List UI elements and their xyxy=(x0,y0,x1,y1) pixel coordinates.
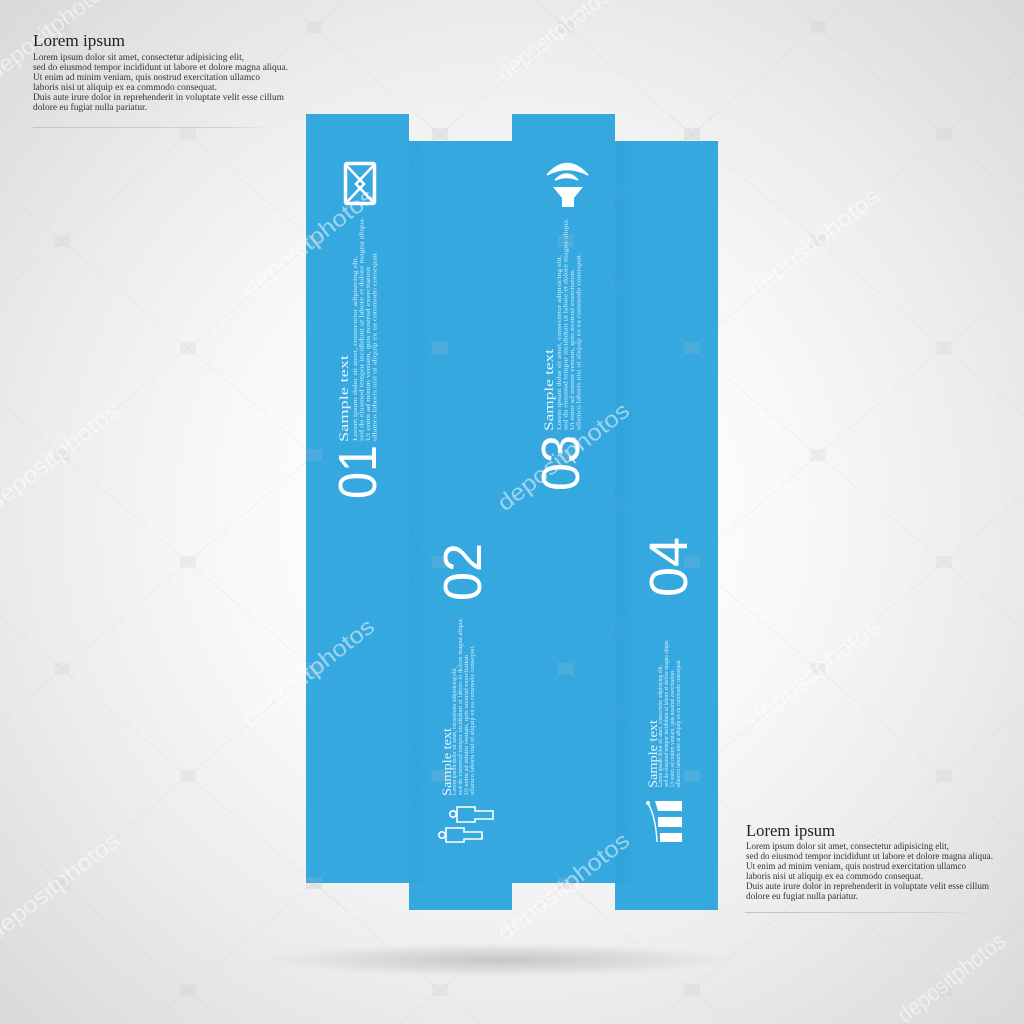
body text 02 xyxy=(452,617,476,795)
body text 04 xyxy=(658,639,682,787)
body text 03: ullamco laboris nisi ut aliquip ex ea commodo consequat. xyxy=(576,252,582,430)
paragraph: dolore eu fugiat nulla pariatur. xyxy=(746,891,858,901)
paragraph xyxy=(33,52,288,112)
body text 03: Ut enim ad minim veniam, quis nostrud exercitation xyxy=(570,270,576,430)
icon: two people xyxy=(439,807,493,842)
fold shade 2 xyxy=(409,141,431,883)
strip 4 xyxy=(615,141,718,910)
body text 01: sed do eiusmod tempor incididunt ut labore et dolore magna aliqua. xyxy=(360,216,366,441)
paragraph: laboris nisi ut aliquip ex ea commodo consequat. xyxy=(33,82,217,92)
watermark logos: depositphotos xyxy=(492,827,634,946)
number 01: 01 xyxy=(328,445,388,499)
heading: Lorem ipsum xyxy=(33,31,125,50)
number 04: 04 xyxy=(639,537,699,597)
body text 01: ullamco laboris nisi ut aliquip ex ea commodo consequat. xyxy=(372,250,378,441)
body text 02: Lorem ipsum dolor sit amet, consectetur adipisicing elit, xyxy=(452,667,458,795)
paragraph: Lorem ipsum dolor sit amet, consectetur adipisicing elit, xyxy=(746,841,949,851)
paragraph: Duis aute irure dolor in reprehenderit in voluptate velit esse cillum xyxy=(33,92,284,102)
panel: blue strips xyxy=(306,114,718,910)
paragraph: Lorem ipsum dolor sit amet, consectetur adipisicing elit, xyxy=(33,52,244,62)
body text 04: Lorem ipsum dolor sit amet, consectetur adipisicing elit, xyxy=(658,665,664,787)
body text 03: sed do eiusmod tempor incididunt ut labore et dolore magna aliqua. xyxy=(564,217,570,430)
body text 04: Ut enim ad minim veniam, quis nostrud exercitation xyxy=(670,671,676,787)
body text 04: sed do eiusmod tempor incididunt ut labore et dolore magna aliqua. xyxy=(664,639,670,787)
heading 02: Sample text xyxy=(440,727,454,796)
ground shadow xyxy=(260,943,740,977)
body text 03: Lorem ipsum dolor sit amet, consectetur adipisicing elit, xyxy=(557,254,563,430)
icon: bar levels with curve xyxy=(646,801,682,842)
body text 04: ullamco laboris nisi ut aliquip ex ea commodo consequat. xyxy=(676,659,682,787)
strip 1 xyxy=(306,114,409,883)
heading: Lorem ipsum xyxy=(746,821,835,840)
section 04 xyxy=(639,537,699,842)
body text 02: Ut enim ad minim veniam, quis nostrud exercitation xyxy=(464,655,470,795)
icon: envelope xyxy=(346,164,374,204)
watermark logos: depositphotos xyxy=(237,183,379,302)
paragraph: sed do eiusmod tempor incididunt ut labore et dolore magna aliqua. xyxy=(33,62,288,72)
heading 03: Sample text xyxy=(542,348,556,431)
heading 04: Sample text xyxy=(646,719,660,788)
strip 2 xyxy=(409,141,512,910)
section 02 xyxy=(433,543,493,842)
body text 03 xyxy=(557,217,582,430)
body text 02: ullamco laboris nisi ut aliquip ex ea commodo consequat. xyxy=(470,644,476,795)
underline xyxy=(745,912,985,913)
watermark logos: depositphotos xyxy=(742,613,884,732)
watermark logos: depositphotos xyxy=(492,397,634,516)
paragraph: dolore eu fugiat nulla pariatur. xyxy=(33,102,147,112)
watermark logos: depositphotos xyxy=(742,183,884,302)
number 03: 03 xyxy=(531,435,591,491)
paragraph: Ut enim ad minim veniam, quis nostrud exercitation ullamco xyxy=(746,861,966,871)
body text 01 xyxy=(353,216,378,441)
strip 3 xyxy=(512,114,615,883)
heading 01: Sample text xyxy=(337,354,351,442)
paragraph: laboris nisi ut aliquip ex ea commodo consequat. xyxy=(746,871,923,881)
paragraph: sed do eiusmod tempor incididunt ut labore et dolore magna aliqua. xyxy=(746,851,993,861)
body text 01: Lorem ipsum dolor sit amet, consectetur adipisicing elit, xyxy=(353,255,359,441)
text block: top left xyxy=(33,31,288,128)
fold shade 4 xyxy=(615,141,637,883)
text block: bottom right xyxy=(745,821,993,913)
section 01 xyxy=(328,164,388,499)
body text 01: Ut enim ad minim veniam, quis nostrud exercitation xyxy=(366,267,372,441)
paragraph: Duis aute irure dolor in reprehenderit in voluptate velit esse cillum xyxy=(746,881,989,891)
paragraph xyxy=(746,841,993,901)
watermark lattice over strips xyxy=(306,114,718,910)
number 02: 02 xyxy=(433,543,493,601)
body text 02: sed do eiusmod tempor incididunt ut labore et dolore magna aliqua. xyxy=(458,617,464,795)
paragraph: Ut enim ad minim veniam, quis nostrud exercitation ullamco xyxy=(33,72,260,82)
underline xyxy=(33,127,273,128)
icon: signal funnel xyxy=(547,164,588,207)
watermark logos: depositphotos xyxy=(237,613,379,732)
section 03 xyxy=(531,164,591,491)
